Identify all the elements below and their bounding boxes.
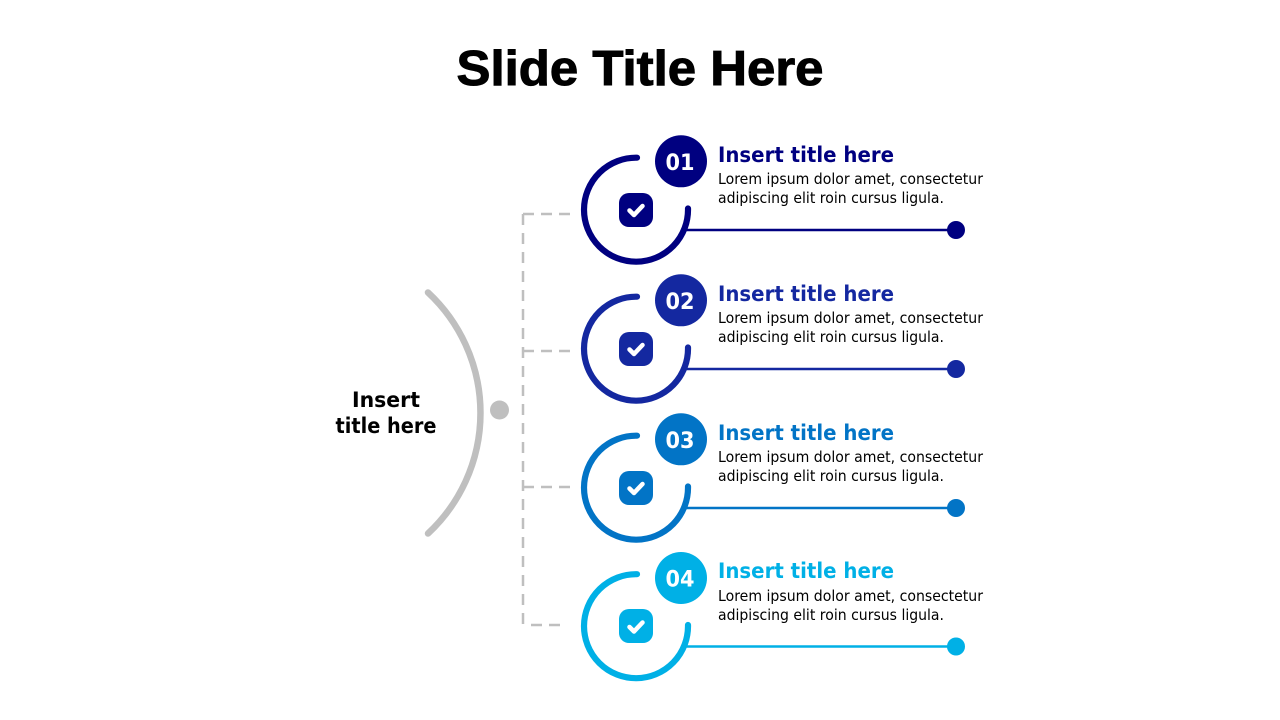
number badge [655,552,707,604]
ring [584,158,688,262]
item 03 [584,413,984,540]
dashed connector [523,214,570,625]
item text: adipiscing elit roin cursus ligula. [718,606,944,624]
central gray arc with label and node [336,292,509,534]
leader line with end dot [686,499,965,517]
item text: Insert title here [718,559,894,583]
item text: Insert title here [718,143,894,167]
item text: Lorem ipsum dolor amet, consectetur [718,587,984,605]
title: Slide Title Here [456,42,824,96]
item text [718,282,984,346]
item text: Lorem ipsum dolor amet, consectetur [718,309,984,327]
leader line with end dot [686,638,965,656]
number badge: 01 [666,151,694,176]
item text: Insert title here [718,282,894,306]
central label [336,388,436,438]
ring [584,436,688,540]
icon: check [619,471,653,505]
item 02 [584,274,984,401]
icon: check [619,193,653,227]
number badge [655,135,707,187]
leader line with end dot [686,360,965,378]
item text [718,559,984,624]
number badge: 03 [666,429,694,454]
item text: adipiscing elit roin cursus ligula. [718,328,944,346]
number badge [655,274,707,326]
item text [718,143,984,207]
gray node [490,400,509,420]
item text: Insert title here [718,421,894,445]
number badge: 02 [666,290,694,315]
item text: Lorem ipsum dolor amet, consectetur [718,448,984,466]
central label: title here [336,414,436,438]
number badge [655,413,707,465]
gray arc [428,292,480,534]
ring [584,574,688,678]
item text: Lorem ipsum dolor amet, consectetur [718,170,984,188]
ring [584,297,688,401]
central label: Insert [352,388,420,412]
item 04 [584,552,984,678]
item 01 [584,135,984,262]
number badge: 04 [666,568,694,593]
item text: adipiscing elit roin cursus ligula. [718,189,944,207]
item text [718,421,984,485]
leader line with end dot [686,221,965,239]
item text: adipiscing elit roin cursus ligula. [718,467,944,485]
icon: check [619,332,653,366]
icon: check [619,609,653,643]
